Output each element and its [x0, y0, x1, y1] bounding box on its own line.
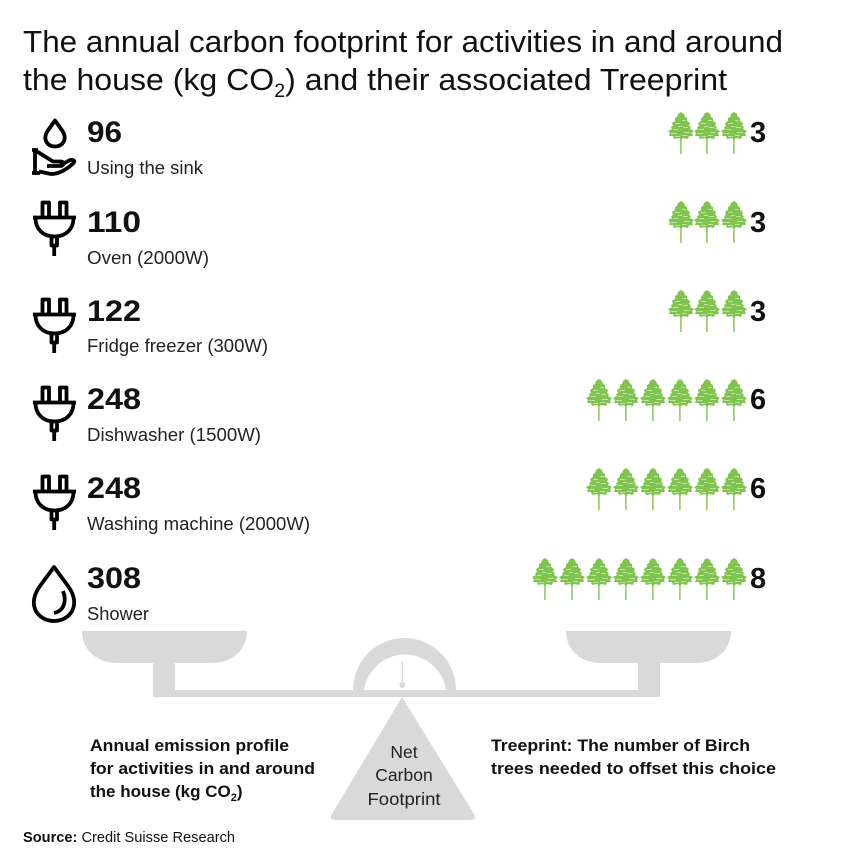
value: 122 — [87, 295, 141, 328]
left caption: the house (kg CO — [90, 782, 231, 801]
dial arch — [353, 638, 456, 690]
row: using the sink — [32, 112, 766, 178]
beam and pan stems — [153, 663, 660, 697]
tree count: 3 — [750, 296, 766, 328]
tree count: 3 — [750, 207, 766, 239]
row: dishwasher — [33, 379, 766, 445]
right caption — [491, 736, 776, 778]
left caption: Annual emission profile — [90, 736, 289, 755]
trees — [668, 112, 747, 154]
row: shower — [34, 558, 766, 624]
value: 96 — [87, 116, 122, 149]
label: Dishwasher (1500W) — [87, 425, 261, 445]
value: 110 — [87, 206, 141, 239]
tree count: 6 — [750, 384, 766, 416]
icon: plug — [33, 300, 76, 353]
icon: plug — [33, 202, 76, 256]
tree count: 3 — [750, 117, 766, 149]
icon: shower drop — [34, 567, 74, 621]
left pan — [82, 631, 247, 663]
label: Using the sink — [87, 158, 204, 178]
right caption: trees needed to offset this choice — [491, 759, 776, 778]
row: washing machine — [33, 468, 766, 534]
trees — [532, 558, 747, 600]
fulcrum label: Carbon — [375, 765, 433, 785]
icon: water drop over hand — [32, 120, 74, 174]
title: the house (kg CO — [23, 62, 266, 97]
balance scale — [82, 631, 731, 820]
label: Washing machine (2000W) — [87, 514, 310, 534]
left caption: for activities in and around — [90, 759, 315, 778]
trees — [668, 201, 747, 243]
trees — [586, 379, 747, 421]
fulcrum label — [368, 742, 441, 809]
title: ) and their associated Treeprint — [285, 62, 727, 97]
title: The annual carbon footprint for activities in and around — [23, 24, 783, 59]
row: oven — [33, 201, 766, 268]
icon: plug — [33, 476, 76, 530]
trees — [668, 290, 747, 332]
needle — [399, 662, 405, 688]
tree count: 6 — [750, 473, 766, 505]
value: 248 — [87, 472, 141, 505]
fulcrum label: Net — [390, 742, 418, 762]
label: Oven (2000W) — [87, 248, 209, 268]
title — [23, 24, 783, 102]
trees — [586, 468, 747, 510]
fulcrum triangle — [331, 697, 475, 820]
right pan — [566, 631, 731, 663]
left caption: 2 — [231, 792, 237, 804]
label: Fridge freezer (300W) — [87, 336, 268, 356]
row: fridge freezer — [33, 290, 766, 356]
source: Source: Credit Suisse Research — [23, 829, 235, 846]
value: 308 — [87, 562, 141, 595]
label: Shower — [87, 604, 149, 624]
value: 248 — [87, 383, 141, 416]
title: 2 — [274, 81, 285, 102]
fulcrum label: Footprint — [368, 789, 441, 809]
tree count: 8 — [750, 563, 766, 595]
left caption: ) — [237, 782, 243, 801]
left caption — [90, 736, 315, 804]
right caption: Treeprint: The number of Birch — [491, 736, 750, 755]
icon: plug — [33, 388, 76, 441]
